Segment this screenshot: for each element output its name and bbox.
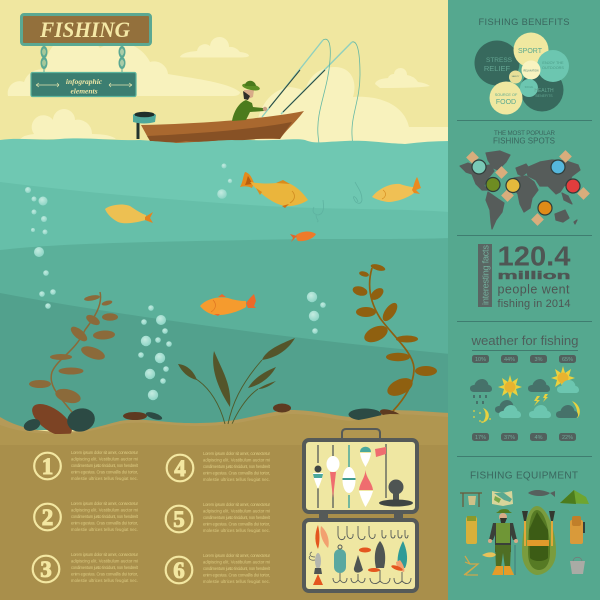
sun — [498, 375, 522, 399]
big yellow fish — [240, 172, 308, 208]
benefits bubble chart — [474, 32, 569, 114]
sun behind cloud — [551, 366, 579, 393]
big statistic — [498, 240, 571, 310]
benefits bubble chart: FOOD — [496, 99, 516, 106]
item 5 — [166, 502, 271, 533]
benefits bubble chart: RELIEF — [484, 64, 511, 73]
map marker tags — [466, 150, 590, 226]
fisherman — [232, 81, 267, 121]
sky background — [0, 0, 450, 145]
item 2 — [34, 501, 139, 532]
benefits bubble chart: BENEFITS — [535, 94, 553, 98]
weather percentages bottom: 17% — [475, 435, 486, 441]
equipment icons — [460, 490, 589, 575]
big statistic: 120.4 — [498, 240, 571, 272]
tackle box — [304, 429, 417, 591]
interesting facts label — [478, 244, 492, 307]
rocks left — [22, 398, 97, 442]
fishing rods and lines behind the boat — [262, 39, 360, 205]
tent — [560, 490, 589, 504]
thermos — [466, 516, 477, 544]
subtitle board: infographic — [66, 77, 103, 86]
title sign — [22, 14, 150, 44]
fishing spots heading: FISHING SPOTS — [493, 136, 555, 146]
big statistic: fishing in 2014 — [498, 298, 570, 310]
light cloud — [529, 405, 551, 418]
fishing spots heading: THE MOST POPULAR — [494, 130, 556, 137]
boat — [141, 111, 304, 143]
weather percentages top — [472, 355, 576, 363]
sand — [0, 410, 450, 445]
fishing spots heading — [493, 130, 556, 146]
weather percentages top: 3% — [535, 357, 543, 363]
item 1: 1 — [42, 454, 53, 479]
item 4: 4 — [174, 456, 186, 481]
weather percentages top: 10% — [475, 357, 486, 363]
benefits bubble chart: RELAXATION — [524, 70, 539, 72]
fishing benefits heading: FISHING BENEFITS — [478, 17, 570, 27]
bubbles middle — [138, 305, 172, 400]
rain cloud — [470, 379, 492, 404]
title sign: FISHING — [39, 17, 130, 42]
benefits bubble chart: SOCIAL — [525, 86, 534, 89]
item 6 — [166, 553, 271, 584]
map markers — [472, 160, 580, 215]
benefits bubble chart: SAFETY — [512, 75, 520, 78]
item 4 — [167, 451, 271, 482]
benefits bubble chart: SPORT — [518, 48, 543, 55]
benefits bubble chart: STRESS — [486, 57, 513, 64]
small orange fish — [290, 231, 316, 242]
caught fish — [482, 552, 496, 557]
left fish — [105, 205, 153, 223]
tray: lures and hooks — [309, 525, 411, 585]
fish icon — [528, 490, 555, 497]
item 1 — [34, 450, 139, 481]
clouds — [8, 36, 450, 145]
angler — [488, 509, 518, 575]
item 3 — [33, 552, 139, 583]
weather icons — [470, 366, 580, 423]
right sidebar — [448, 0, 600, 600]
bubbles left — [25, 164, 232, 309]
benefits bubble chart: HEALTH — [534, 88, 554, 94]
folding chair — [464, 556, 478, 575]
big statistic: million — [498, 270, 571, 282]
seaweed right — [352, 263, 437, 411]
rocks middle — [123, 404, 291, 421]
subtitle board — [31, 72, 136, 96]
benefits bubble chart: OUTDOORS — [542, 66, 564, 70]
bucket — [570, 557, 585, 574]
rocks right — [348, 407, 403, 422]
lid: floats — [313, 444, 413, 508]
weather percentages bottom: 22% — [562, 435, 573, 441]
weather percentages bottom: 37% — [504, 435, 515, 441]
outboard motor — [133, 112, 156, 139]
water layers — [0, 138, 450, 430]
weather percentages bottom: 4% — [535, 435, 543, 441]
orange fish — [200, 294, 256, 316]
storm cloud — [528, 379, 550, 406]
world map — [460, 150, 590, 229]
map — [492, 491, 513, 506]
bubbles right — [307, 292, 326, 334]
partly cloudy — [495, 400, 521, 418]
equipment heading: FISHING EQUIPMENT — [470, 470, 578, 482]
numbered items — [33, 450, 271, 584]
night clear — [473, 408, 491, 423]
item 2: 2 — [42, 505, 53, 530]
night cloud — [556, 401, 580, 418]
reed plant — [178, 338, 295, 424]
weather percentages top: 65% — [562, 357, 573, 363]
right fish — [372, 177, 421, 202]
lower sand panel — [0, 414, 450, 600]
weather percentages top: 44% — [504, 357, 515, 363]
weather percentages bottom — [472, 433, 576, 441]
item 5: 5 — [173, 507, 185, 532]
subtitle board: elements — [70, 86, 98, 96]
campfire pot — [460, 493, 482, 507]
item 3: 3 — [40, 557, 52, 582]
item 6: 6 — [173, 558, 185, 583]
benefits bubble chart: SOURCE OF — [495, 93, 518, 97]
seaweed left — [29, 292, 118, 412]
backpack — [570, 516, 584, 544]
benefits bubble chart: ENJOY THE — [542, 61, 564, 65]
hooks in the water — [313, 182, 362, 222]
weather heading: weather for fishing — [470, 333, 578, 348]
sign chains — [42, 46, 124, 72]
inflatable boat — [522, 506, 556, 575]
big statistic: people went — [498, 282, 570, 296]
interesting facts label: interesting facts — [480, 245, 490, 305]
